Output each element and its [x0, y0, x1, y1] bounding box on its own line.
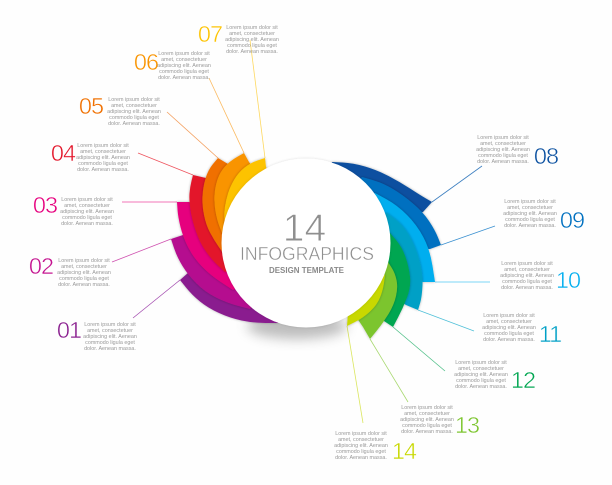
item 02: adipiscing elit. Aenean [57, 270, 111, 276]
item 09: Lorem ipsum dolor sit [504, 199, 556, 205]
item 02: commodo ligula eget [59, 276, 109, 282]
item 05: adipiscing elit. Aenean [107, 109, 161, 115]
item 01: 01 [57, 317, 81, 343]
item 03: 03 [33, 192, 58, 218]
item 12: 12 [511, 367, 535, 393]
item 09: adipiscing elit. Aenean [503, 211, 557, 217]
item 07: dolor. Aenean massa. [226, 49, 278, 55]
item 05: commodo ligula eget [109, 115, 159, 121]
item 06: amet, consectetuer [161, 57, 207, 63]
segment 04 [189, 175, 306, 272]
item 06: adipiscing elit. Aenean [157, 63, 211, 69]
item 04: amet, consectetuer [80, 149, 126, 155]
segment 02 [171, 235, 306, 309]
item 11: adipiscing elit. Aenean [482, 325, 536, 331]
item 09: dolor. Aenean massa. [504, 223, 556, 229]
subheading: DESIGN TEMPLATE [269, 265, 344, 275]
item 02: 02 [29, 253, 53, 279]
item 14 [334, 431, 417, 464]
item 04: commodo ligula eget [78, 161, 128, 167]
segment 03 [177, 202, 306, 290]
item 14: adipiscing elit. Aenean [334, 443, 388, 449]
item 12 [454, 360, 535, 393]
item 12: commodo ligula eget [456, 378, 506, 384]
item 02 [29, 253, 111, 288]
item 08: amet, consectetuer [480, 141, 526, 147]
item 05: Lorem ipsum dolor sit [108, 97, 160, 103]
item 04: 04 [51, 140, 76, 166]
item 10: dolor. Aenean massa. [501, 285, 553, 291]
item 03: amet, consectetuer [64, 203, 110, 209]
item 07: 07 [198, 21, 222, 47]
item 03: dolor. Aenean massa. [61, 221, 113, 227]
item 09 [503, 199, 584, 233]
item 06: Lorem ipsum dolor sit [158, 51, 210, 57]
big number 14: 14 [283, 207, 326, 250]
item 13 [400, 405, 480, 438]
item 04: adipiscing elit. Aenean [76, 155, 130, 161]
item 08 [476, 135, 559, 169]
item 14: 14 [392, 438, 417, 464]
heading INFOGRAPHICS: INFOGRAPHICS [240, 243, 374, 264]
item 09: amet, consectetuer [507, 205, 553, 211]
item 13: Lorem ipsum dolor sit [401, 405, 453, 411]
item 09: 09 [560, 207, 584, 233]
item 10: commodo ligula eget [502, 279, 552, 285]
segment 10 [306, 193, 435, 282]
center title [240, 207, 374, 275]
item 11: Lorem ipsum dolor sit [483, 313, 535, 319]
item 08: 08 [534, 143, 559, 169]
item 04 [51, 140, 130, 173]
item 06 [134, 49, 211, 81]
item 10: amet, consectetuer [504, 267, 550, 273]
segment 08 [306, 162, 432, 243]
item 05: amet, consectetuer [111, 103, 157, 109]
item 01: Lorem ipsum dolor sit [84, 322, 136, 328]
item 01: commodo ligula eget [85, 340, 135, 346]
item 03: adipiscing elit. Aenean [60, 209, 114, 215]
item 07: amet, consectetuer [229, 31, 275, 37]
item 05: 05 [79, 93, 104, 119]
item 10 [500, 261, 581, 293]
item 02: Lorem ipsum dolor sit [58, 258, 110, 264]
item 03: commodo ligula eget [62, 215, 112, 221]
item 08: dolor. Aenean massa. [477, 159, 529, 165]
item 08: Lorem ipsum dolor sit [477, 135, 529, 141]
item 01: amet, consectetuer [87, 328, 133, 334]
segment 11 [306, 213, 423, 310]
item 07: commodo ligula eget [227, 43, 277, 49]
item 03 [33, 192, 114, 227]
left fan segments [171, 153, 306, 323]
item 11: commodo ligula eget [484, 331, 534, 337]
item 14: Lorem ipsum dolor sit [335, 431, 387, 437]
item 05: dolor. Aenean massa. [108, 121, 160, 127]
item 07 [198, 21, 279, 55]
segment 13 [306, 243, 397, 339]
leader lines [112, 40, 495, 423]
item 09: commodo ligula eget [505, 217, 555, 223]
item 01: adipiscing elit. Aenean [83, 334, 137, 340]
item 02: amet, consectetuer [61, 264, 107, 270]
item 14: amet, consectetuer [338, 437, 384, 443]
item 06: commodo ligula eget [159, 69, 209, 75]
segment 07 [224, 158, 306, 243]
item 06: 06 [134, 49, 159, 75]
segment 06 [214, 153, 306, 243]
item 12: adipiscing elit. Aenean [454, 372, 508, 378]
item 05 [79, 93, 161, 127]
item 14: commodo ligula eget [336, 449, 386, 455]
item 01 [57, 317, 137, 352]
item 02: dolor. Aenean massa. [58, 282, 110, 288]
item 04: Lorem ipsum dolor sit [77, 143, 129, 149]
item 01: dolor. Aenean massa. [84, 346, 136, 352]
item 10: 10 [556, 267, 581, 293]
segment 12 [306, 233, 410, 327]
item 13: commodo ligula eget [402, 423, 452, 429]
segment 01 [180, 243, 306, 323]
item 08: adipiscing elit. Aenean [476, 147, 530, 153]
item 13: adipiscing elit. Aenean [400, 417, 454, 423]
segment 14 [306, 243, 385, 326]
segment 05 [202, 158, 306, 253]
item 13: amet, consectetuer [404, 411, 450, 417]
circle drop shadow [247, 313, 347, 339]
segment 09 [306, 177, 441, 249]
item 10: Lorem ipsum dolor sit [501, 261, 553, 267]
item 10: adipiscing elit. Aenean [500, 273, 554, 279]
right fan segments [306, 162, 441, 339]
item 07: Lorem ipsum dolor sit [226, 25, 278, 31]
item 03: Lorem ipsum dolor sit [61, 197, 113, 203]
item 07: adipiscing elit. Aenean [225, 37, 279, 43]
item 13: dolor. Aenean massa. [401, 429, 453, 435]
item 11: 11 [539, 321, 561, 347]
item 13: 13 [455, 412, 480, 438]
item 08: commodo ligula eget [478, 153, 528, 159]
item 14: dolor. Aenean massa. [335, 455, 387, 461]
item 12: dolor. Aenean massa. [455, 384, 507, 390]
central circle [222, 158, 390, 328]
item 12: Lorem ipsum dolor sit [455, 360, 507, 366]
item 06: dolor. Aenean massa. [158, 75, 210, 81]
item 11 [482, 313, 561, 347]
item 11: amet, consectetuer [486, 319, 532, 325]
item 11: dolor. Aenean massa. [483, 337, 535, 343]
item 04: dolor. Aenean massa. [77, 167, 129, 173]
item 12: amet, consectetuer [458, 366, 504, 372]
